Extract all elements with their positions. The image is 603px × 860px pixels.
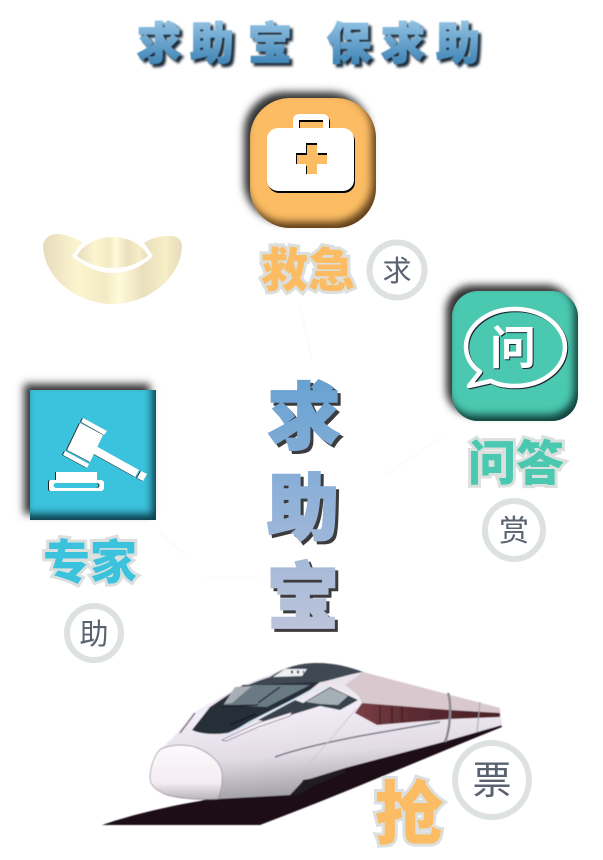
badge: 助: 助 [79,618,109,651]
track [102,722,502,825]
blue trim [222,686,330,739]
body stripe [275,722,440,757]
train illustration [102,663,502,825]
passenger window band [355,703,500,725]
title: 求 [384,23,428,72]
label: 抢: 抢 [374,776,444,853]
label: 救急: 救急 [261,244,355,297]
title: 求 [381,20,425,69]
central title: 求助宝 [267,379,343,642]
title: 助 [190,20,234,69]
headlight side [222,712,292,741]
icon: speech bubble [452,291,578,421]
central title: 求助宝: 助 [267,470,339,550]
title [137,20,483,72]
badge: 求 [370,242,424,298]
windshield [192,682,320,734]
title: 求 [140,23,184,72]
central title: 求助宝: 宝 [270,562,342,642]
wipers [223,687,280,725]
roof [242,663,363,688]
title: 宝 [251,23,295,72]
central title: 求助宝: 求 [271,382,343,462]
upper body highlight [345,672,500,713]
faint connector lines [160,305,447,578]
side window [258,687,358,722]
title: 宝 [248,20,292,69]
icon: gavel [30,390,156,520]
train body [150,663,502,799]
headlight top [273,669,307,677]
title: 助 [436,20,480,69]
badge: 助 [67,606,121,660]
central title: 求助宝: 助 [270,473,342,553]
central title: 求助宝: 宝 [267,559,339,639]
label: 专家: 专家 [43,536,137,589]
icon: gold ingot [43,234,182,304]
title: 保 [330,23,374,72]
title: 求 [137,20,181,69]
central title: 求助宝: 求 [268,379,340,459]
badge: 求: 求 [382,255,412,288]
icon: first-aid kit [250,98,376,228]
carriage joints [445,693,450,742]
title: 助 [439,23,483,72]
undercarriage [290,768,345,795]
badge: 票: 票 [472,760,512,803]
nose cap [150,745,222,799]
label: 问答: 问答 [468,438,564,491]
title: 保 [327,20,371,69]
title: 助 [193,23,237,72]
badge: 赏 [485,501,543,559]
icon: speech bubble: 问 [490,322,536,374]
badge: 票 [455,743,529,817]
badge: 赏: 赏 [499,515,529,548]
